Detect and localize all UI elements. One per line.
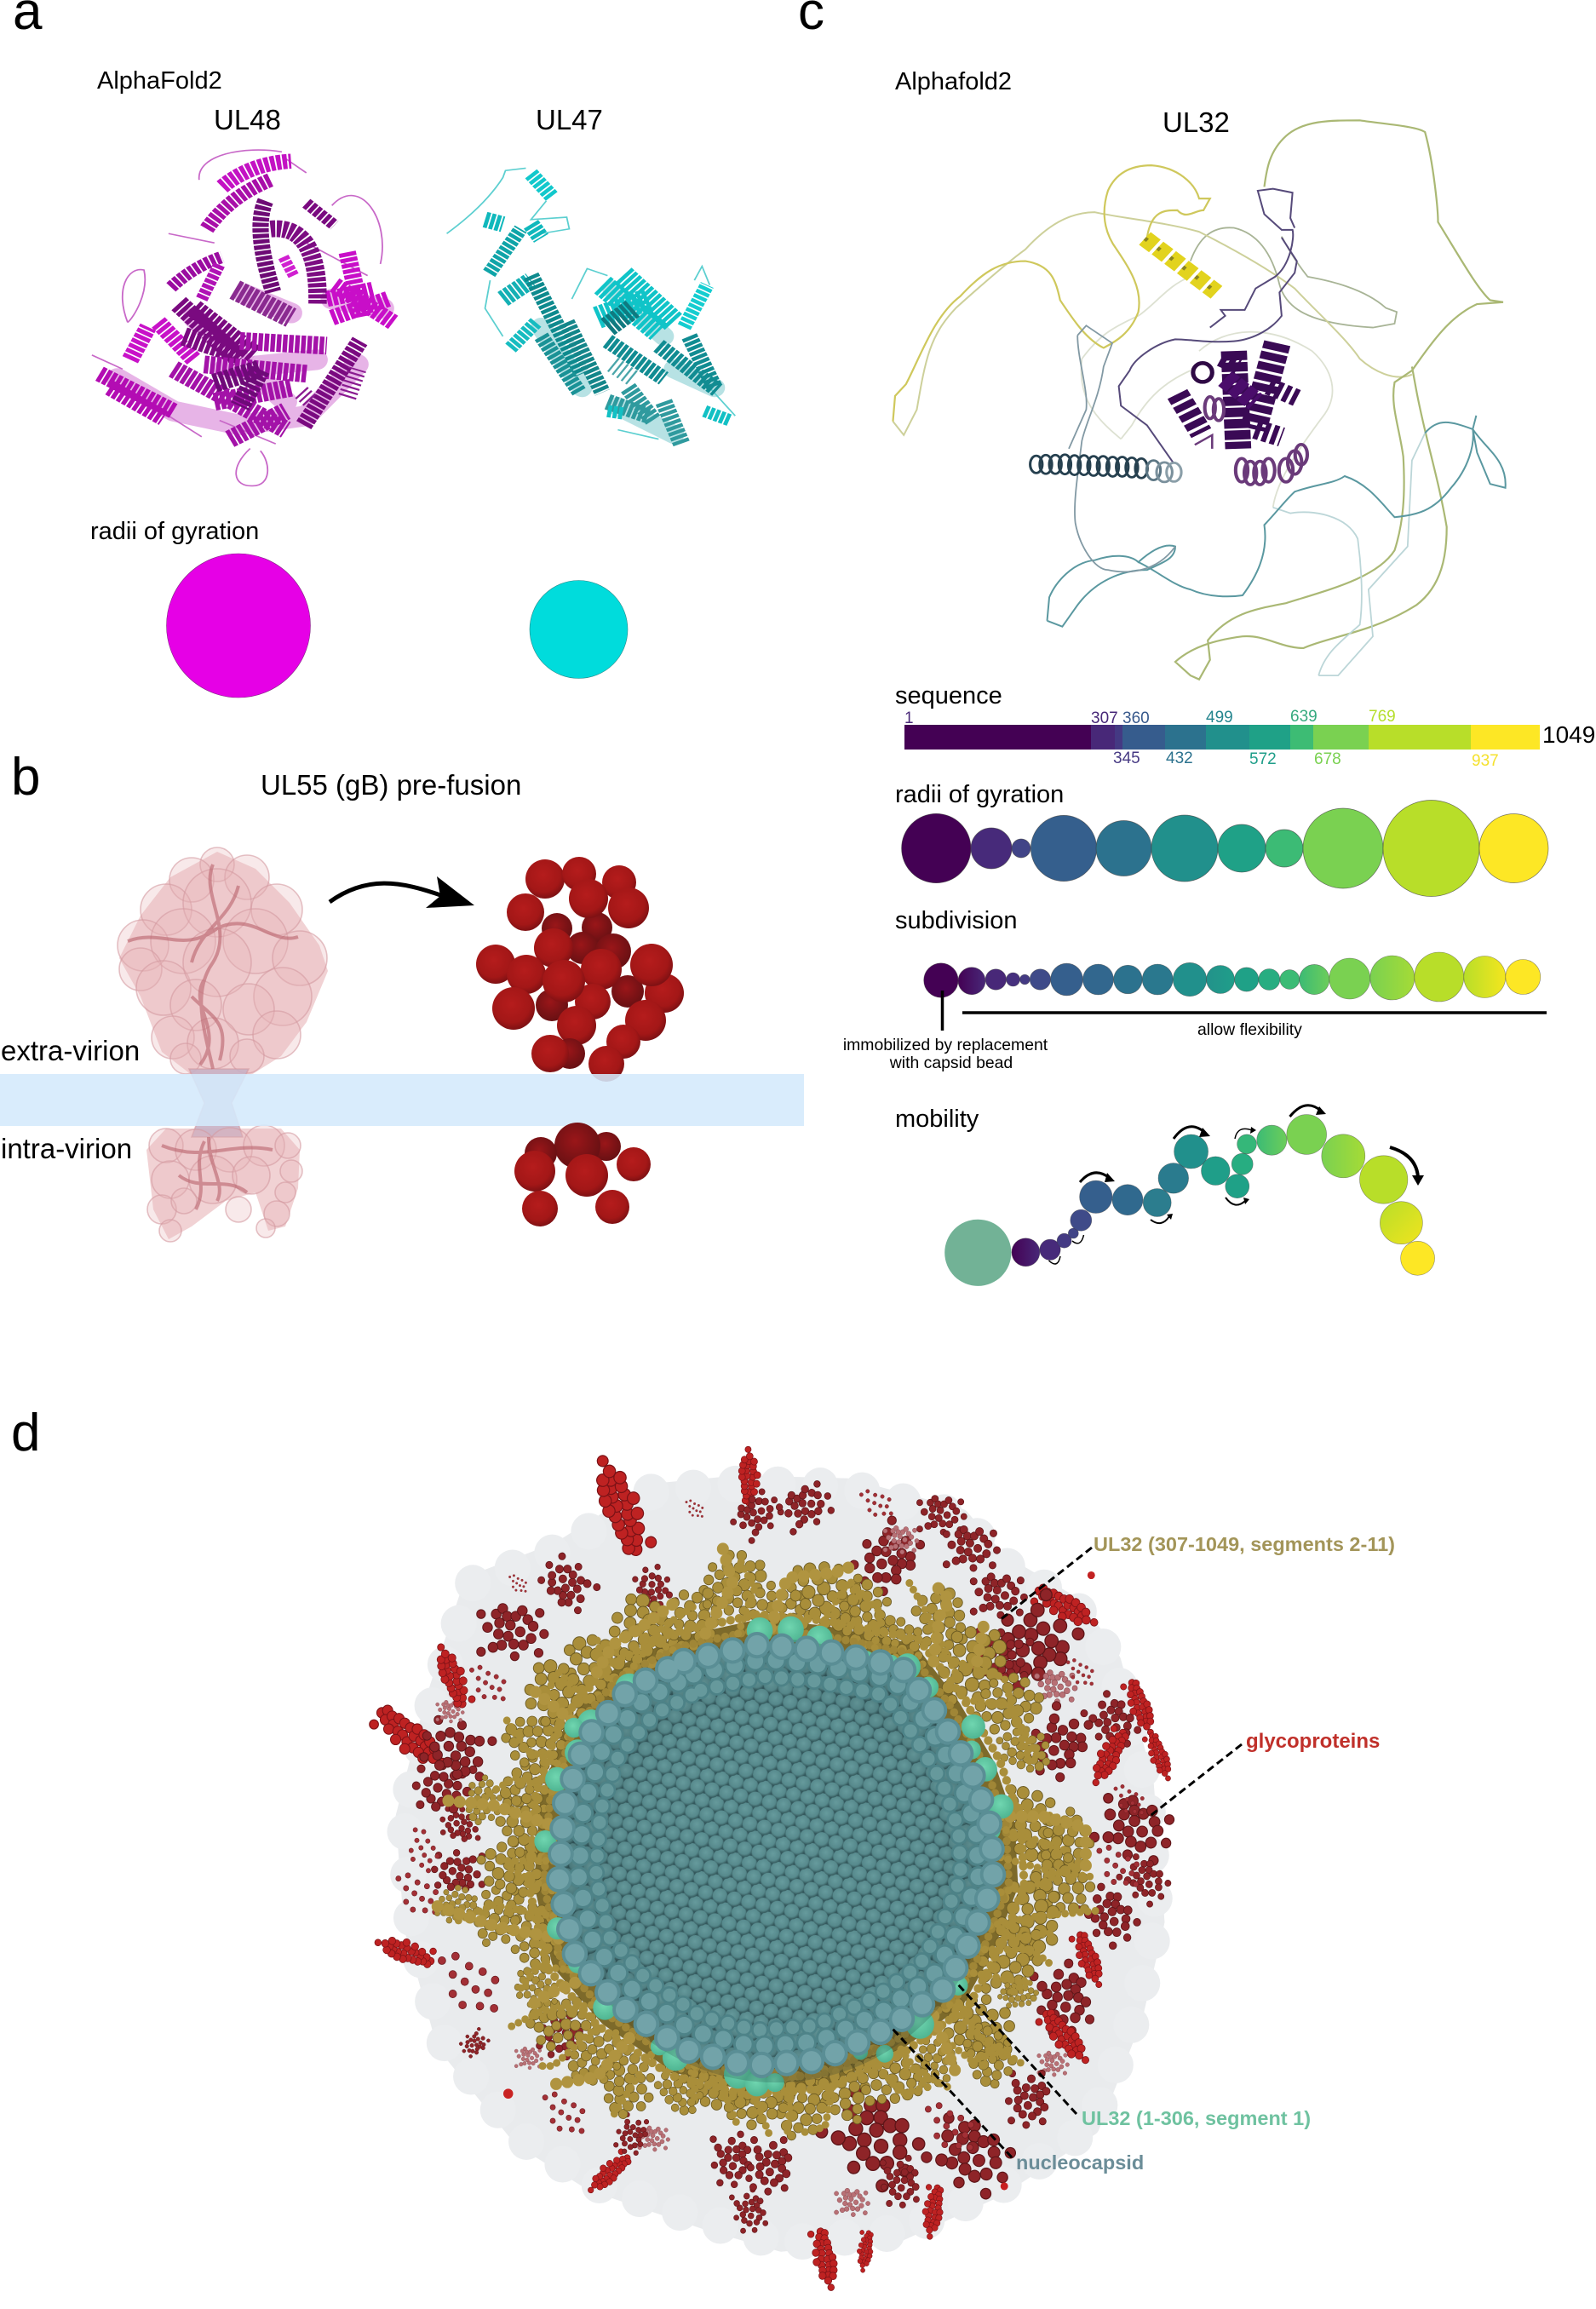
panel: d: [11, 1404, 1395, 2292]
labels: sequence residue numbers: 678: [1314, 750, 1341, 768]
section: mobility: [895, 1106, 1435, 1286]
labels: sequence residue numbers: 572: [1249, 750, 1277, 768]
bar: sequence segments: [904, 725, 1540, 750]
structure: UL55 bead model lower: [514, 1123, 651, 1226]
label: extra-virion: extra-virion: [1, 1035, 140, 1066]
labels: sequence residue numbers: 1: [904, 709, 914, 727]
callout: nucleocapsid: [893, 2029, 1144, 2174]
heading: mobility: mobility: [895, 1106, 979, 1133]
heading: subdivision: subdivision: [895, 907, 1017, 934]
section: sequence: [895, 682, 1595, 770]
structure: UL55 bead model upper: [476, 857, 684, 1082]
labels: sequence residue numbers: 639: [1290, 708, 1318, 726]
structure: UL55 surface: [118, 847, 328, 1242]
callout: glycoproteins: glycoproteins: [1246, 1730, 1380, 1753]
chart: radii bubbles: [902, 801, 1548, 896]
heading: UL32: UL32: [1163, 106, 1230, 138]
labels: sequence residue numbers: 307: [1091, 709, 1118, 727]
line: flexibility bracket: [962, 1011, 1547, 1014]
labels: sequence residue numbers: 360: [1122, 709, 1150, 727]
callout: glycoproteins: [1148, 1730, 1380, 1818]
structure: UL32 ribbon: [893, 120, 1506, 680]
section: subdivision: [843, 907, 1547, 1072]
label: immobilized by replacement: immobilized by replacement: [843, 1036, 1048, 1054]
structure: UL48 ribbon: [92, 150, 393, 485]
circle: UL47 radius: [530, 581, 628, 678]
callout: UL32 307-1049: [999, 1533, 1395, 1621]
beads: UL32 segments 2-11: [428, 1538, 1108, 2145]
heading: UL47: UL47: [536, 104, 603, 135]
label: d: d: [11, 1404, 40, 1462]
band: gold tegument base: [559, 1645, 993, 2066]
label: 1049: 1049: [1542, 721, 1595, 748]
labels: sequence residue numbers: 769: [1369, 708, 1396, 726]
arrows: mobility rotation: [1049, 1106, 1424, 1264]
envelope: grey lipid membrane: [404, 1484, 1157, 2243]
section: radii of gyration: [895, 781, 1548, 896]
labels: sequence residue numbers: 937: [1472, 752, 1499, 770]
labels: sequence residue numbers: 345: [1113, 750, 1140, 767]
beads: nucleocapsid: [559, 1639, 993, 2082]
callout: UL32 1-306: [958, 1984, 1311, 2129]
arrow: surface to beads: [330, 876, 474, 908]
panel: b: [0, 748, 804, 1242]
labels: sequence residue numbers: 432: [1166, 750, 1193, 767]
labels: sequence residue numbers: 499: [1206, 709, 1233, 727]
line: immobilized pointer: [941, 991, 944, 1031]
callout: nucleocapsid: nucleocapsid: [1016, 2151, 1144, 2174]
chart: mobility beads: [944, 1115, 1435, 1286]
labels: sequence residue numbers: [904, 708, 1499, 770]
panel: c: [798, 0, 1595, 1286]
label: allow flexibility: allow flexibility: [1197, 1020, 1302, 1039]
callout: UL32 307-1049: UL32 (307-1049, segments 2-11): [1094, 1533, 1395, 1555]
panel: a: [13, 0, 735, 698]
circle: UL48 radius: [167, 554, 310, 698]
heading: UL55 (gB) pre-fusion: UL55 (gB) pre-fusion: [261, 769, 521, 801]
beads: UL32 segment 1: [534, 1617, 1013, 2096]
label: immobilized by replacement: with capsid bead: [889, 1054, 1013, 1072]
heading: Alphafold2: Alphafold2: [895, 68, 1012, 95]
heading: radii of gyration: radii of gyration: [895, 781, 1064, 808]
label: b: b: [11, 748, 40, 807]
band: membrane: [0, 1074, 804, 1126]
structure: UL47 ribbon: [447, 168, 735, 444]
illustration: virion model: [370, 1445, 1186, 2292]
heading: sequence: sequence: [895, 682, 1002, 709]
label: intra-virion: intra-virion: [1, 1133, 132, 1164]
callout: UL32 1-306: UL32 (1-306, segment 1): [1082, 2107, 1311, 2129]
beads: glycoproteins: [370, 1445, 1186, 2292]
chart: subdivision beads: [924, 952, 1541, 1002]
heading: radii of gyration: radii of gyration: [90, 518, 259, 545]
heading: AlphaFold2: AlphaFold2: [97, 67, 222, 95]
heading: UL48: UL48: [214, 104, 281, 135]
